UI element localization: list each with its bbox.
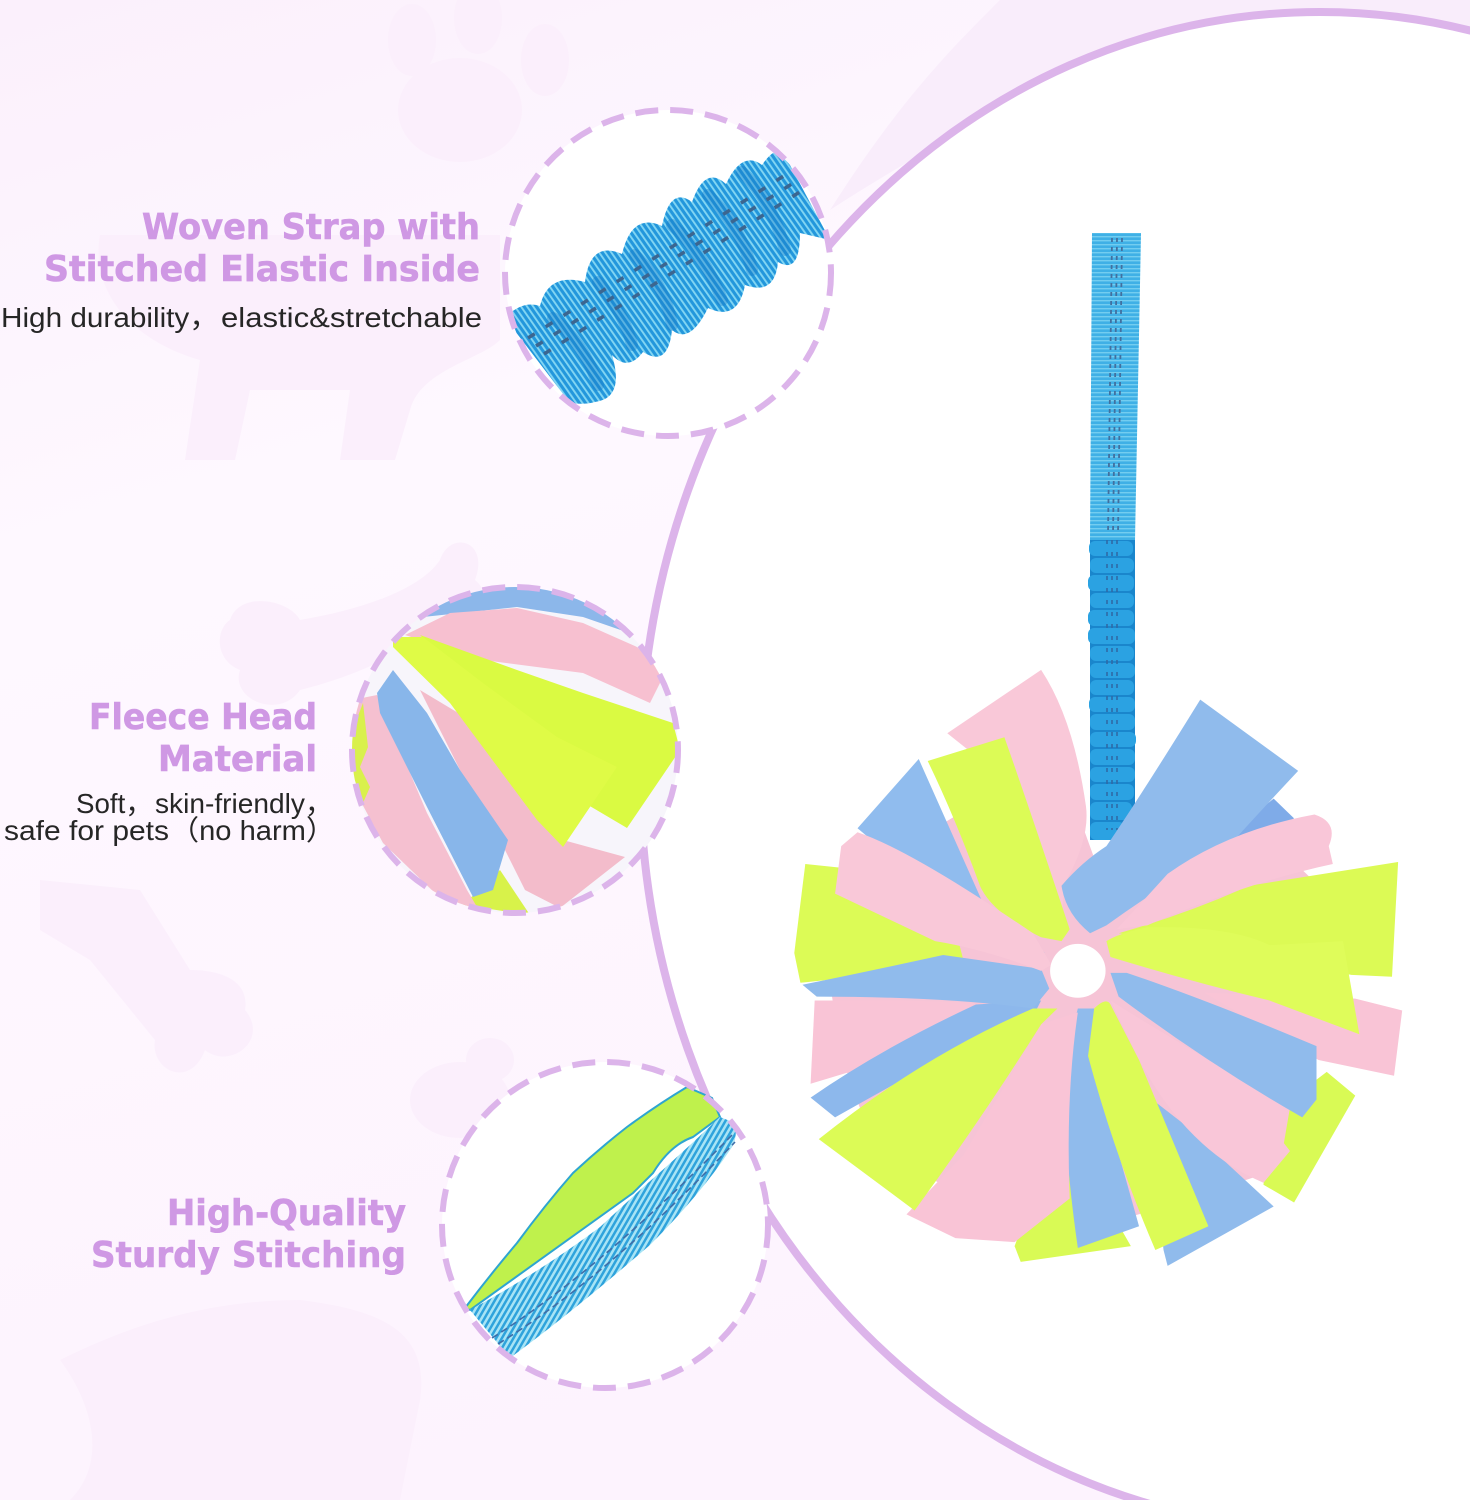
large white circle with purple outline	[640, 12, 1470, 1500]
inset: stitching detail	[442, 1062, 768, 1388]
text: fleece description	[4, 788, 335, 846]
heading: fleece head: Material	[158, 739, 317, 780]
heading: fleece head: Fleece Head	[89, 697, 317, 738]
text: fleece description: Soft，	[76, 788, 153, 819]
product: fleece pom head	[794, 670, 1402, 1266]
heading: woven strap: Stitched Elastic Inside	[44, 249, 480, 290]
text: woven strap description: High durability，	[1, 302, 219, 333]
text: fleece description: skin-friendly，	[155, 788, 333, 819]
heading: stitching	[91, 1193, 406, 1276]
heading: fleece head	[89, 697, 317, 780]
text: fleece description: safe for pets	[4, 815, 169, 846]
inset: woven strap detail	[505, 110, 831, 436]
text: fleece description: （no harm）	[170, 815, 335, 846]
heading: woven strap: Woven Strap with	[142, 207, 480, 248]
heading: stitching: Sturdy Stitching	[91, 1235, 406, 1276]
inset: fleece detail	[350, 580, 680, 915]
heading: stitching: High-Quality	[167, 1193, 406, 1234]
product: elastic strap	[1088, 233, 1141, 840]
text: woven strap description: elastic&stretchable	[221, 302, 482, 333]
heading: woven strap	[44, 207, 480, 290]
text: woven strap description	[1, 302, 482, 333]
